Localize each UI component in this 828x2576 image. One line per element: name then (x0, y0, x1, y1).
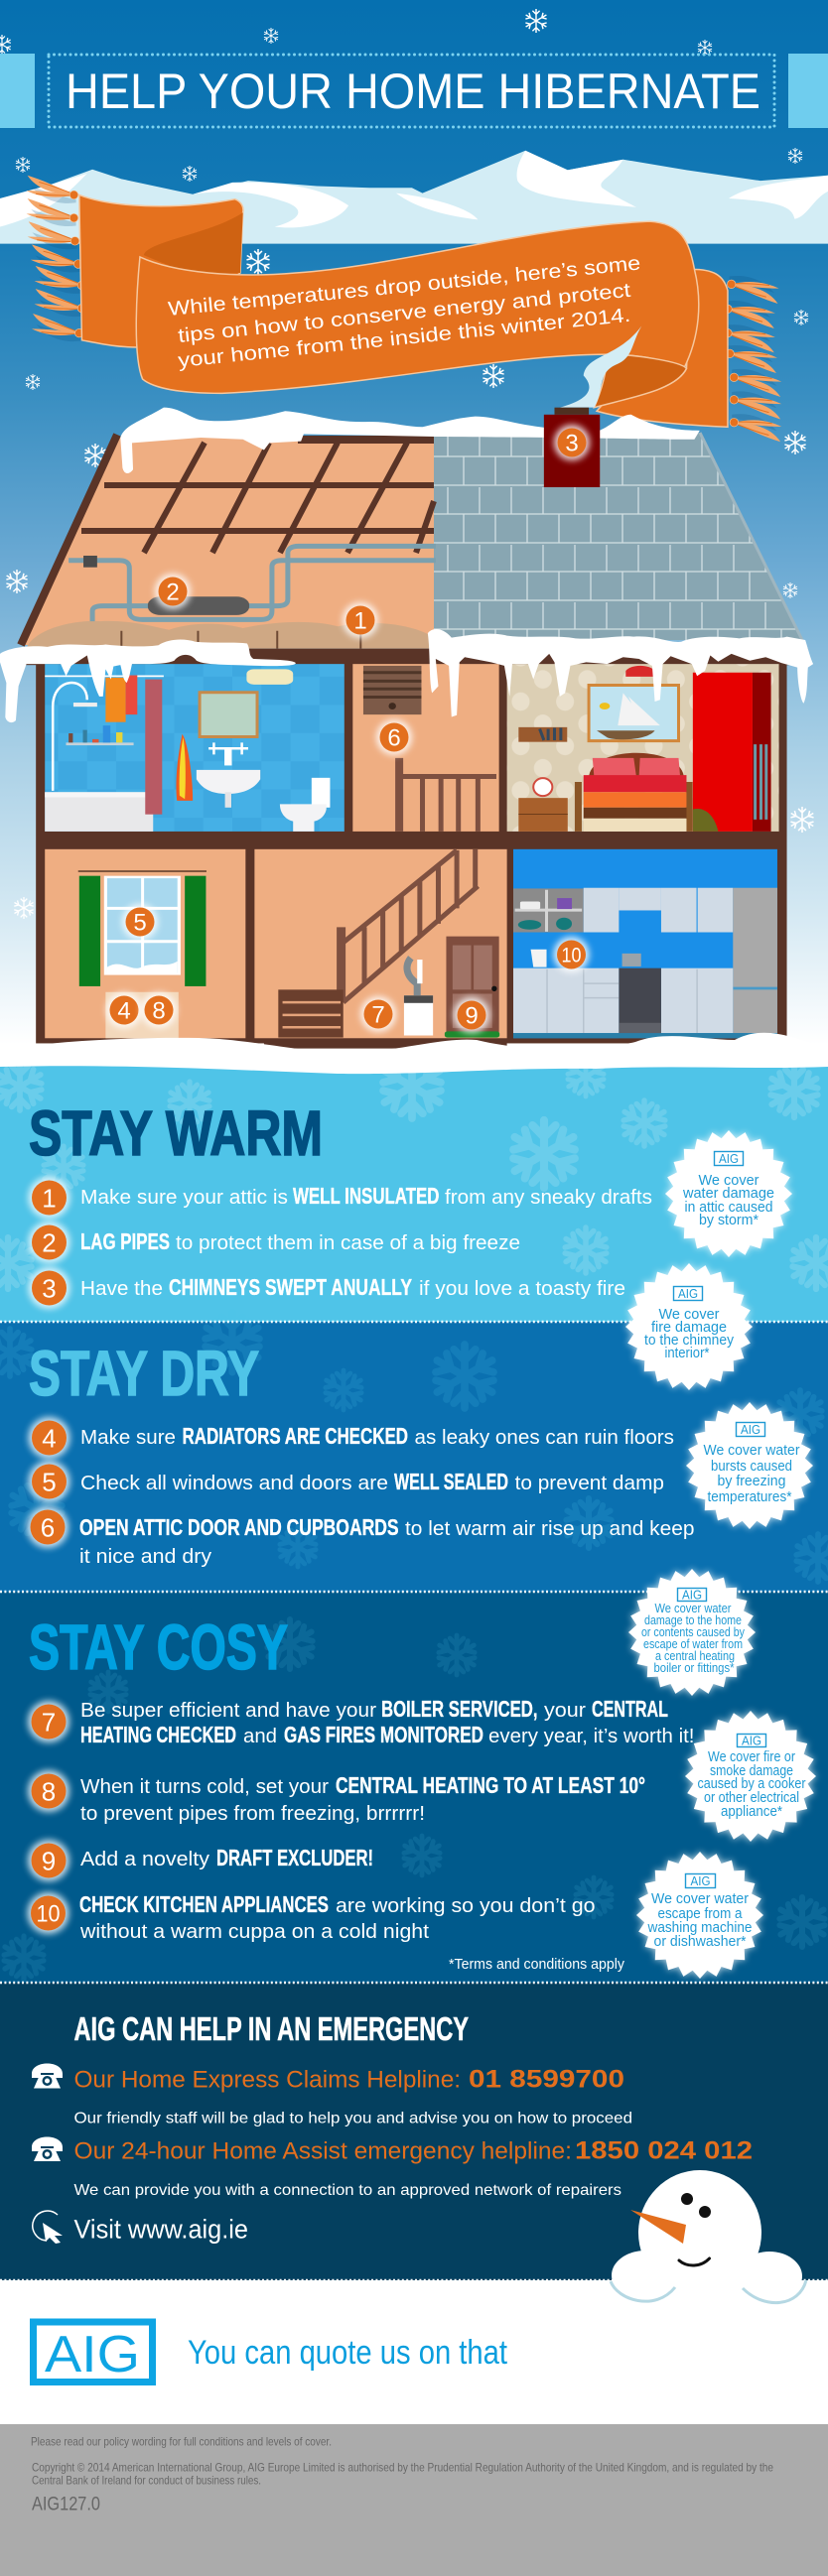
tip 3: 3 (42, 1274, 57, 1304)
tip 2: LAG PIPES (80, 1228, 170, 1254)
tip 10: CHECK KITCHEN APPLIANCES (79, 1891, 329, 1917)
marker 10 (554, 937, 590, 972)
scarf shape (27, 176, 781, 442)
tagline: You can quote us on that (188, 2334, 507, 2372)
cover badge: fire or smoke (685, 1711, 816, 1842)
house number markers (106, 425, 590, 1033)
tip 5 (28, 1461, 664, 1502)
tip 1 (28, 1177, 652, 1219)
tip 10: 10 (36, 1901, 60, 1927)
legal footer panel (0, 2424, 828, 2576)
icon: telephone (32, 2064, 63, 2088)
section dividers (0, 1322, 828, 2280)
home assist helpline: 1850 024 012 (575, 2137, 753, 2165)
home assist description: We can provide you with a connection to an approved network of repairers (73, 2182, 621, 2199)
title banner: HELP YOUR HOME HIBERNATE (66, 64, 760, 119)
background snowflakes: dry (0, 1313, 828, 1582)
cover badge: water bursts: We cover water (703, 1442, 800, 1459)
AIG logo: AIG (45, 2326, 140, 2383)
cover badge: washing machine: or dishwasher* (653, 1933, 747, 1950)
cover badge: attic: water damage (682, 1185, 774, 1202)
tip 4 (28, 1417, 674, 1459)
house roof (21, 433, 802, 645)
marker 7: 7 (371, 1002, 385, 1028)
icon: telephone (32, 2137, 63, 2161)
snow on the roof (120, 408, 700, 473)
cover badge: washing machine: We cover water (651, 1890, 749, 1907)
cover badge: washing machine: escape from a (657, 1905, 743, 1922)
tip 6: OPEN ATTIC DOOR AND CUPBOARDS (79, 1514, 399, 1540)
tip 5: to prevent damp (515, 1473, 664, 1494)
marker 4: 4 (117, 998, 131, 1024)
section background: stay cosy (0, 1592, 828, 1983)
cover badge: central heating: boiler or fittings* (653, 1660, 735, 1675)
marker 2: 2 (166, 580, 180, 605)
tip 3: if you love a toasty fire (419, 1278, 625, 1300)
cover badge: attic (665, 1130, 792, 1257)
cover badge: central heating: escape of water from (643, 1636, 743, 1651)
marker 6 (376, 719, 412, 755)
tip 3 (28, 1267, 625, 1309)
cover badge: fire or smoke: We cover fire or (708, 1748, 795, 1765)
tip 9: Add a novelty (80, 1849, 209, 1870)
staircase (342, 849, 478, 1002)
tip 3: Have the (80, 1278, 163, 1300)
tip 7: and (243, 1726, 277, 1747)
tip 10: are working so you don’t go (336, 1895, 596, 1917)
snowman (611, 2170, 806, 2303)
tip 2 (28, 1222, 520, 1263)
heading: stay cosy: STAY COSY (29, 1611, 288, 1683)
claims helpline description: Our friendly staff will be glad to help you and advise you on how to proceed (73, 2110, 632, 2127)
tip 2: to protect them in case of a big freeze (176, 1232, 520, 1254)
house body (21, 649, 808, 1049)
scarf text: your home from the inside this winter 2014. (177, 305, 631, 372)
room: upper hall (352, 664, 499, 832)
tip 8: When it turns cold, set your (80, 1776, 329, 1798)
copyright: Central Bank of Ireland for conduct of business rules. (32, 2473, 261, 2487)
cover badge: fire or smoke: smoke damage (710, 1762, 793, 1779)
draft excluder (445, 1031, 499, 1038)
tip 8: to prevent pipes from freezing, brrrrrr! (80, 1803, 425, 1825)
cover badge: chimney: AIG (678, 1286, 698, 1301)
cover badge: chimney: to the chimney (644, 1332, 734, 1349)
home assist helpline (73, 2137, 753, 2165)
heading: stay warm: STAY WARM (29, 1097, 323, 1169)
cover badge: central heating: a central heating (655, 1648, 735, 1663)
claims helpline: 01 8599700 (469, 2066, 624, 2094)
marker 7 (360, 996, 396, 1032)
tip 1: from any sneaky drafts (445, 1187, 652, 1209)
website link: Visit www.aig.ie (73, 2215, 248, 2245)
tip 7: 7 (42, 1707, 56, 1737)
background snowflakes: cosy (1, 1619, 828, 1980)
tip 7: CENTRAL (592, 1696, 668, 1722)
cover badge: central heating: We cover water (655, 1601, 732, 1615)
smile (679, 2258, 709, 2265)
marker 4 (106, 992, 142, 1028)
marker 1: 1 (353, 607, 367, 635)
attic interior (27, 546, 436, 649)
heading: stay dry: STAY DRY (29, 1338, 259, 1409)
tip 3: CHIMNEYS SWEPT ANUALLY (169, 1274, 412, 1300)
cover badge: water bursts: bursts caused (711, 1458, 792, 1475)
snow on the eaves (0, 629, 813, 722)
home assist helpline: Our 24-hour Home Assist emergency helpline: (73, 2137, 572, 2165)
tip 10: without a warm cuppa on a cold night (79, 1921, 429, 1943)
AIG logo (34, 2322, 153, 2383)
tip 7: every year, it’s worth it! (488, 1726, 695, 1747)
marker 8 (141, 992, 177, 1028)
tip 7: BOILER SERVICED, (381, 1696, 538, 1722)
tip 9: DRAFT EXCLUDER! (216, 1845, 373, 1870)
tip 1: Make sure your attic is (80, 1187, 288, 1209)
marker 3: 3 (565, 431, 579, 456)
marker 1 (343, 602, 378, 638)
room: kitchen (513, 849, 777, 1038)
lagged pipe tank (148, 596, 249, 615)
scarf text: tips on how to conserve energy and protect (177, 280, 632, 347)
claims helpline: Our Home Express Claims Helpline: (73, 2066, 461, 2094)
chimney (544, 326, 641, 487)
title banner (0, 54, 828, 128)
cover badge: washing machine: washing machine (647, 1919, 753, 1936)
insulation (27, 621, 436, 649)
emergency heading: AIG CAN HELP IN AN EMERGENCY (73, 2010, 469, 2047)
cover badge: central heating: or contents caused by (641, 1624, 745, 1639)
carrot nose (630, 2210, 686, 2244)
tip 5: 5 (42, 1467, 57, 1496)
cover badge: water bursts: temperatures* (707, 1488, 792, 1505)
scarf text (167, 252, 641, 372)
room: hallway (254, 849, 507, 1038)
eyes (681, 2193, 693, 2205)
sky background (0, 0, 828, 1077)
cover badge: water bursts: AIG (741, 1422, 760, 1437)
cover badge: chimney: We cover (659, 1306, 720, 1323)
window (78, 870, 207, 986)
section background: stay dry (0, 1322, 828, 1592)
marker 9: 9 (465, 1002, 479, 1030)
room: bedroom (507, 664, 779, 832)
landing rail (399, 758, 496, 832)
snowflakes in the sky (0, 9, 815, 919)
marker 6: 6 (387, 724, 401, 752)
tip 6 (27, 1506, 695, 1568)
body (612, 2170, 802, 2301)
scarf text: While temperatures drop outside, here’s some (167, 252, 641, 321)
cover badge: water bursts: by freezing (717, 1473, 786, 1489)
tip 2: 2 (42, 1228, 57, 1258)
tip 6: to let warm air rise up and keep (405, 1518, 695, 1540)
cover badge: fire or smoke: AIG (742, 1733, 761, 1748)
claims helpline (73, 2066, 624, 2094)
tip 1: WELL INSULATED (293, 1183, 439, 1209)
door (446, 937, 499, 1032)
icon: cursor (33, 2211, 63, 2244)
tip 7: GAS FIRES MONITORED (284, 1722, 483, 1747)
white footer panel (0, 2281, 828, 2424)
marker 8: 8 (152, 998, 166, 1024)
room: living room (45, 849, 245, 1038)
attic hatch (363, 666, 421, 714)
terms note: *Terms and conditions apply (449, 1956, 624, 1973)
cover badge: central heating (628, 1569, 756, 1696)
policy note: Please read our policy wording for full conditions and levels of cover. (31, 2435, 332, 2449)
cover badge: attic: in attic caused (685, 1199, 772, 1216)
tip 7: HEATING CHECKED (80, 1722, 236, 1747)
tip 5: WELL SEALED (394, 1469, 508, 1494)
snow shadow (611, 2280, 806, 2303)
tip 7 (28, 1696, 695, 1747)
tip 4: as leaky ones can ruin floors (415, 1427, 674, 1449)
cover badge: central heating: damage to the home (644, 1612, 742, 1627)
tip 4: RADIATORS ARE CHECKED (183, 1423, 408, 1449)
tip 7: Be super efficient and have your (80, 1700, 376, 1722)
ground snow (0, 1033, 828, 1082)
marker 10: 10 (562, 945, 582, 966)
cover badge: water bursts (686, 1402, 813, 1529)
tip 9: 9 (42, 1846, 56, 1875)
tip 6: it nice and dry (79, 1546, 211, 1568)
roof beams (21, 435, 434, 645)
tip 10 (28, 1891, 596, 1943)
tip 9 (28, 1840, 373, 1881)
marker 3 (554, 425, 590, 460)
cover badge: washing machine (636, 1852, 763, 1979)
cover badge: fire or smoke: or other electrical (704, 1789, 799, 1806)
room: bathroom (45, 664, 345, 832)
tip 8: CENTRAL HEATING TO AT LEAST 10° (336, 1772, 645, 1798)
pipes (69, 546, 436, 621)
marker 9 (454, 997, 489, 1033)
roof: attic side (21, 438, 434, 645)
cover badge: chimney: fire damage (651, 1319, 727, 1336)
tip 8 (28, 1770, 645, 1825)
cover badge: fire or smoke: appliance* (721, 1803, 782, 1820)
cover badge: attic: by storm* (699, 1212, 759, 1228)
boiler (407, 958, 417, 995)
marker 2 (155, 574, 191, 609)
cover badge: central heating: AIG (682, 1588, 702, 1602)
valve (83, 556, 97, 568)
background snowflakes: warm (0, 1055, 828, 1289)
cover badge: washing machine: AIG (691, 1873, 711, 1888)
tip 1: 1 (42, 1183, 57, 1213)
marker 5: 5 (133, 909, 147, 937)
tip 7: your (544, 1700, 586, 1722)
copyright (32, 2461, 773, 2487)
cover badge: chimney: interior* (665, 1345, 710, 1361)
section background: stay warm (0, 1066, 828, 1322)
cover badge: fire or smoke: caused by a cooker (697, 1775, 806, 1792)
roof: tiled side (434, 433, 802, 640)
cover badge: attic: AIG (719, 1151, 739, 1166)
tip 4: Make sure (80, 1427, 176, 1449)
cover badge: chimney (625, 1263, 753, 1390)
radiator (105, 992, 179, 1038)
tip 8: 8 (42, 1776, 56, 1806)
tip 6: 6 (41, 1512, 55, 1542)
tip 5: Check all windows and doors are (80, 1473, 388, 1494)
cover badge: attic: We cover (699, 1172, 759, 1189)
tip 4: 4 (42, 1423, 57, 1453)
scarf banner (27, 176, 781, 442)
snowy mountains (0, 151, 828, 244)
marker 5 (122, 904, 158, 940)
section background: emergency (0, 1983, 828, 2280)
reference code: AIG127.0 (32, 2495, 100, 2514)
